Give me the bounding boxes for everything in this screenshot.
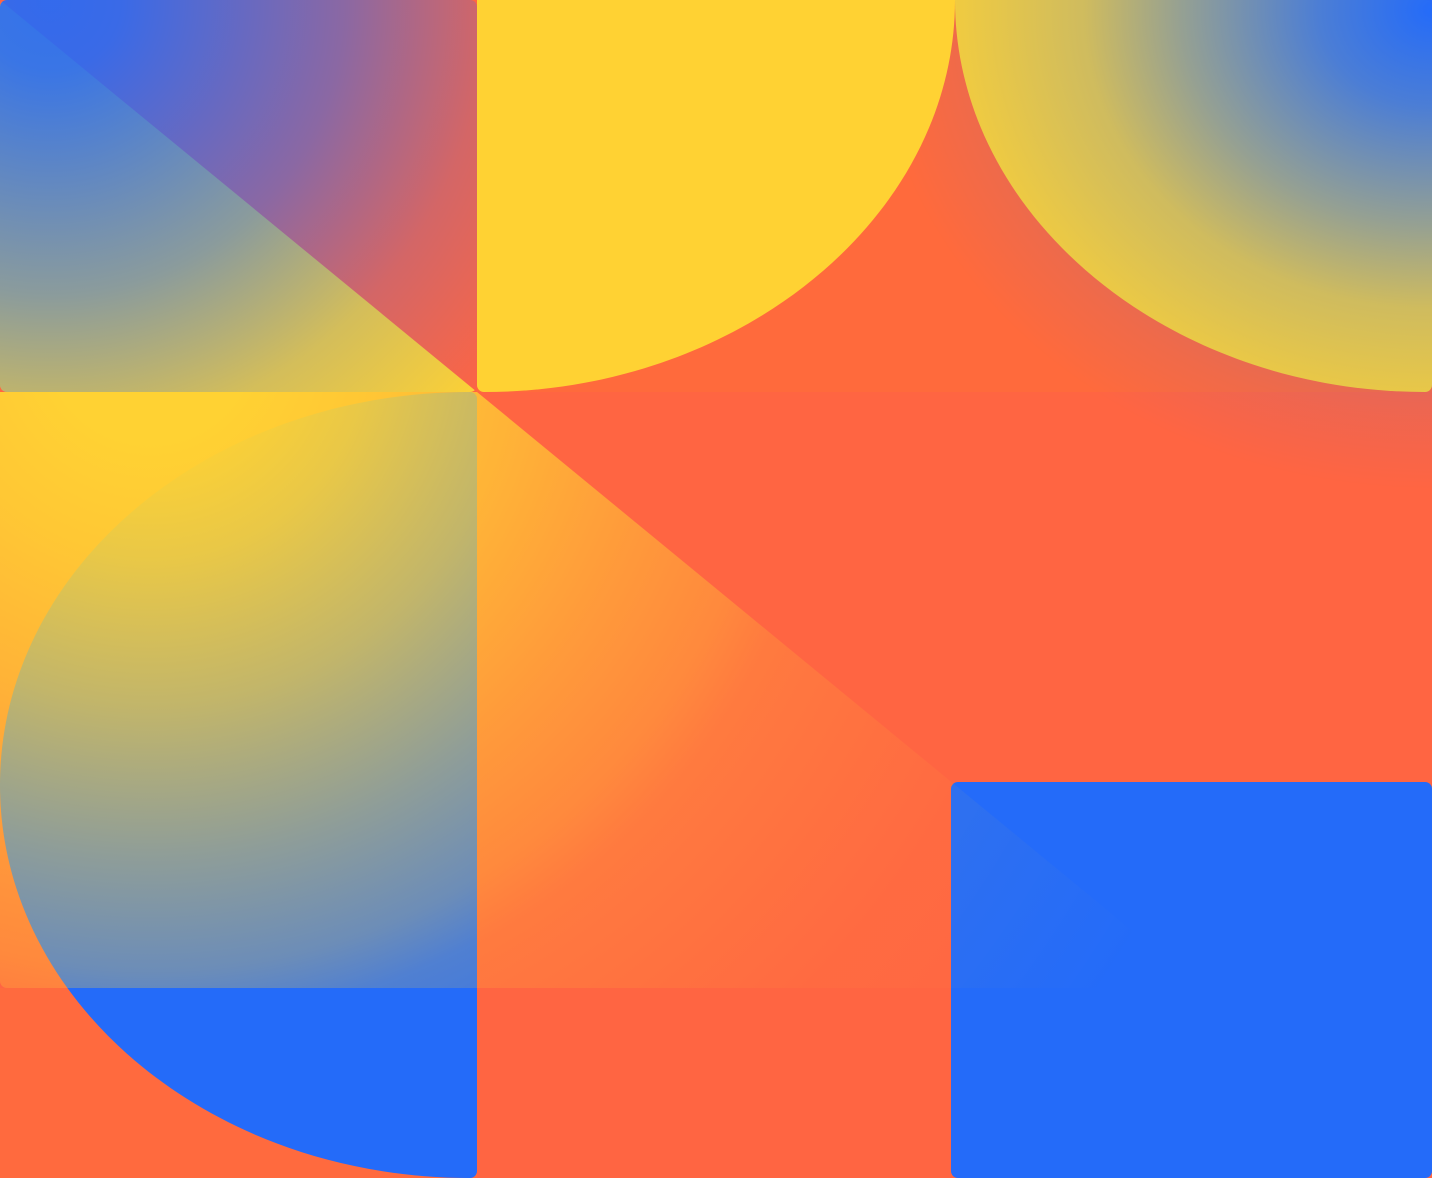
panel: top left square bbox=[0, 0, 477, 392]
shape: yellow triangle bbox=[0, 0, 477, 392]
panel: top band tint bbox=[477, 0, 1432, 392]
shape: blue half ellipse bbox=[0, 392, 477, 1178]
panel: bottom left tint bbox=[0, 988, 477, 1178]
shape: blue rectangle bbox=[951, 782, 1432, 1178]
shape: orange square base bbox=[0, 0, 477, 392]
overlay: top right blue glow bbox=[860, 0, 1432, 500]
shape: top right quarter ellipse bbox=[955, 0, 1432, 392]
shape: yellow quarter ellipse bbox=[477, 0, 955, 392]
overlay: lower yellow fading triangle bbox=[0, 392, 1202, 988]
overlay: top left blue glow bbox=[0, 0, 477, 392]
